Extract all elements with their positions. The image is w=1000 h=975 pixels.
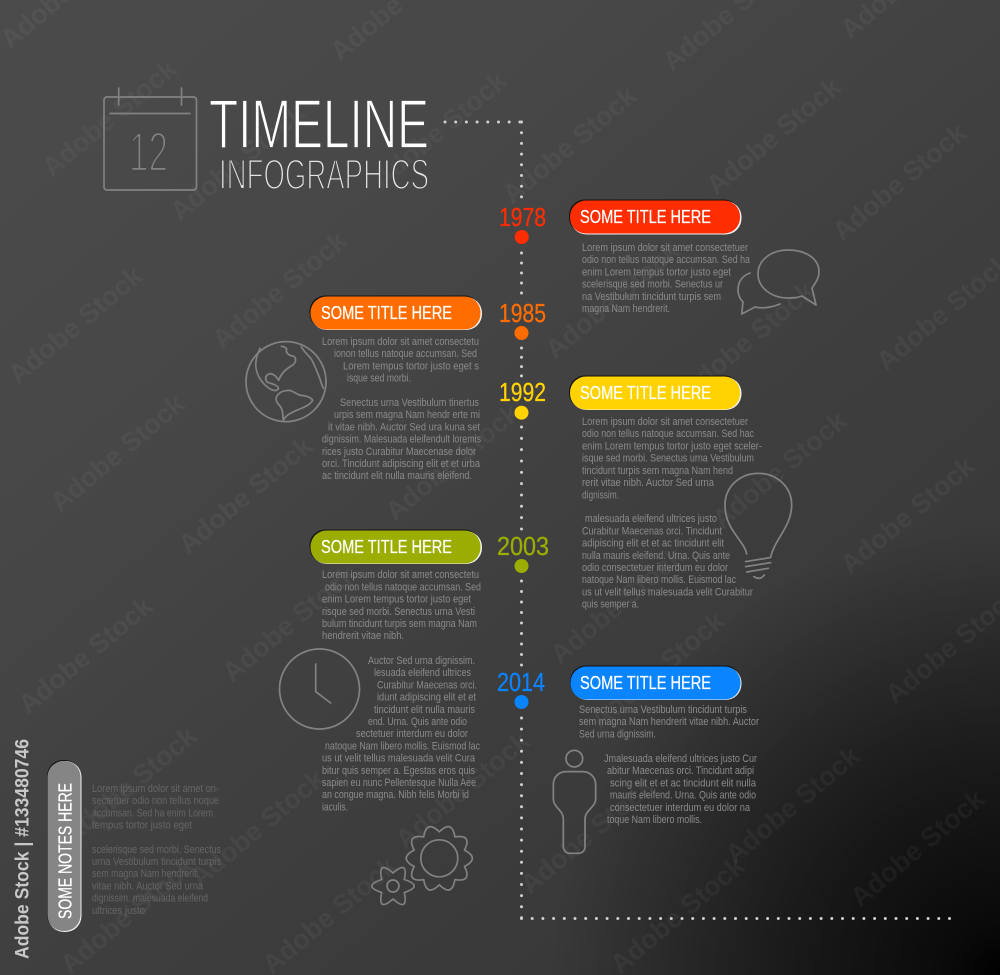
watermark pattern: Adobe Stock bbox=[827, 117, 973, 247]
notes text: scelerisque sed morbi. Senectus bbox=[92, 844, 221, 856]
icon: person bbox=[553, 750, 596, 853]
text block 1978: scelerisque sed morbi. Senectus ur bbox=[582, 278, 723, 290]
text block 2014: Senectus urna Vestibulum tincidunt turpis bbox=[579, 704, 748, 716]
watermark pattern: Adobe Stock bbox=[515, 770, 661, 900]
notes text: sectetuer odio non tellus noque bbox=[92, 795, 219, 807]
text block 1992: dignissim. bbox=[582, 490, 619, 502]
notes text: sem magna Nam hendrerit. bbox=[92, 868, 199, 880]
text block 1992: Lorem ipsum dolor sit amet consectetuer bbox=[582, 416, 748, 428]
text block 1985: ac tincidunt elit nulla mauris eleifend. bbox=[322, 470, 472, 482]
watermark pattern: Adobe Stock bbox=[380, 397, 526, 527]
notes pill: SOME NOTES HERE bbox=[56, 783, 76, 919]
text block 2003: iaculis. bbox=[322, 802, 348, 814]
text block 1985: dignissim. Malesuada eleifendult loremis bbox=[322, 434, 481, 446]
title pill 1992: SOME TITLE HERE bbox=[580, 383, 711, 403]
notes text: urna Vestibulum tincidunt turpis bbox=[92, 856, 222, 868]
notes text: dignissim. malesuada eleifend bbox=[92, 892, 208, 904]
title pill 1978 bbox=[569, 200, 742, 234]
text block 1978: odio non tellus natoque accumsan. Sed ha bbox=[582, 254, 750, 266]
text block 2003: natoque Nam libero mollis. Euismod lac bbox=[325, 740, 480, 752]
text block 1985: ionon tellus natoque accumsan. Sed bbox=[334, 348, 477, 360]
year 1992 marker bbox=[499, 377, 546, 420]
watermark pattern: Adobe Stock bbox=[540, 235, 686, 365]
text block 2003 bbox=[322, 569, 481, 814]
title: TIMELINE bbox=[209, 85, 429, 163]
watermark pattern: Adobe Stock bbox=[217, 558, 363, 688]
notes text: Lorem ipsum dolor sit amet on- bbox=[92, 783, 219, 795]
side watermark credit: Adobe Stock | #133480746 bbox=[12, 739, 34, 959]
watermark pattern: Adobe Stock bbox=[3, 260, 149, 390]
icon: light bulb bbox=[725, 473, 792, 578]
notes text: vitae nibh. Auctor Sed urna bbox=[92, 880, 203, 892]
watermark pattern: Adobe Stock bbox=[207, 225, 353, 355]
text block 2003: idunt adipiscing elit et et bbox=[377, 692, 476, 704]
title pill 2003: SOME TITLE HERE bbox=[321, 537, 452, 557]
icon: calendar bbox=[104, 88, 196, 190]
text block 2003: an congue magna. Nibh felis Morbi id bbox=[322, 789, 469, 801]
text block 2003: end. Urna. Quis ante odio bbox=[368, 716, 467, 728]
title bbox=[209, 85, 429, 199]
year 1985 marker bbox=[499, 298, 546, 340]
text block 1992: natoque Nam libero mollis. Euismod lac bbox=[582, 574, 736, 586]
calendar day number: 12 bbox=[129, 120, 168, 183]
text block 2003: enim Lorem tempus tortor justo eget bbox=[322, 594, 471, 606]
watermark pattern: Adobe Stock bbox=[545, 540, 691, 670]
text block 2014: consectetuer interdum eu dolor na bbox=[610, 802, 750, 814]
text block 2014: abitur Maecenas orci. Tincidunt adipi bbox=[607, 765, 754, 777]
year 1992 marker: 1992 bbox=[499, 377, 546, 407]
text block 1992: enim Lorem tempus tortor justo eget sceler- bbox=[582, 440, 762, 452]
title pill 1978: SOME TITLE HERE bbox=[580, 207, 711, 227]
text block 1992: adipiscing elit et et ac tincidunt elit bbox=[582, 538, 724, 550]
text block 2003: hendrerit vitae nibh. bbox=[322, 630, 404, 642]
icon: gears bbox=[372, 827, 472, 905]
text block 2014: sem magna Nam hendrerit vitae nibh. Auctor bbox=[579, 716, 759, 728]
text block 2003: Lorem ipsum dolor sit amet consectetu bbox=[322, 569, 479, 581]
text block 1985: urpis sem magna Nam hendr erte mi bbox=[334, 409, 480, 421]
icon: globe bbox=[246, 342, 326, 422]
text block 1992: nulla mauris eleifend. Urna. Quis ante bbox=[582, 550, 730, 562]
text block 1992: odio consectetuer interdum eu dolor bbox=[582, 562, 728, 574]
text block 1985 bbox=[322, 336, 481, 482]
watermark pattern: Adobe Stock bbox=[835, 450, 981, 580]
year 1985 marker: 1985 bbox=[499, 298, 546, 328]
icon: speech bubbles bbox=[738, 250, 819, 314]
icon: clock bbox=[280, 649, 360, 729]
text block 1978: magna Nam hendrerit. bbox=[582, 303, 670, 315]
watermark pattern: Adobe Stock bbox=[845, 783, 991, 913]
text block 1985: isque sed morbi. bbox=[347, 372, 411, 384]
text block 2003: lesuada eleifend ultrices bbox=[374, 667, 472, 679]
text block 2014: scing elit et et ac tincidunt elit nulla bbox=[610, 778, 756, 790]
text block 2003: tincidunt elit nulla mauris bbox=[374, 704, 476, 716]
title pill 2014 bbox=[570, 666, 742, 700]
watermark pattern: Adobe Stock bbox=[37, 53, 183, 183]
text block 1992: us ut velit tellus malesuada velit Curabitur bbox=[582, 586, 753, 598]
text block 1985: orci. Tincidunt adipiscing elit et et urba bbox=[322, 458, 480, 470]
watermark pattern: Adobe Stock bbox=[390, 725, 536, 855]
text block 1992: tincidunt turpis sem magna Nam hend bbox=[582, 465, 733, 477]
watermark pattern: Adobe Stock bbox=[185, 763, 331, 893]
text block 1985: it vitae nibh. Auctor Sed ura kuna set bbox=[328, 422, 480, 434]
watermark pattern: Adobe Stock bbox=[45, 388, 191, 518]
text block 2014: Jmalesuada eleifend ultrices justo Cur bbox=[604, 753, 757, 765]
title pill 2014: SOME TITLE HERE bbox=[580, 673, 711, 693]
watermark pattern: Adobe Stock bbox=[57, 720, 203, 850]
text block 1992: isque sed morbi. Senectus urna Vestibulum bbox=[582, 452, 754, 464]
watermark pattern: Adobe Stock bbox=[13, 590, 159, 720]
text block 2003: Auctor Sed urna dignissim. bbox=[368, 655, 475, 667]
text block 2003: risque sed morbi. Senectus urna Vesti bbox=[322, 606, 475, 618]
title pill 2003 bbox=[310, 530, 482, 564]
text block 1985: Lorem ipsum dolor sit amet consectetu bbox=[322, 336, 479, 348]
watermark pattern: Adobe Stock bbox=[707, 405, 853, 535]
watermark pattern: Adobe Stock bbox=[585, 605, 731, 735]
text block 2003: odio non tellus natoque accumsan. Sed bbox=[325, 582, 481, 594]
text block 2003: sapien eu nunc Pellentesque Nulla Aee bbox=[322, 777, 476, 789]
text block 1978 bbox=[582, 242, 750, 315]
text block 2014: toque Nam libero mollis. bbox=[607, 814, 702, 826]
year 2014 marker bbox=[497, 667, 545, 709]
notes pill bbox=[47, 760, 82, 932]
text block 1992: Curabitur Maecenas orci. Tincidunt bbox=[582, 526, 722, 538]
text block 1985: Senectus urna Vestibulum tinertus bbox=[340, 397, 479, 409]
text block 2003: Curabitur Maecenas orci. bbox=[377, 680, 477, 692]
text block 1985: rices justo Curabitur Maecenase dolor bbox=[322, 446, 476, 458]
text block 1985: Lorem tempus tortor justo eget s bbox=[343, 360, 480, 372]
text block 1992: quis semper a. bbox=[582, 598, 639, 610]
text block 1992 bbox=[582, 416, 762, 610]
text block 1992: malesuada eleifend ultrices justo bbox=[585, 513, 717, 525]
year 2014 marker: 2014 bbox=[497, 667, 545, 697]
title pill 1985: SOME TITLE HERE bbox=[321, 303, 452, 323]
text block 1992: rerit vitae nibh. Auctor Sed urna bbox=[582, 477, 714, 489]
title pill 1992 bbox=[569, 376, 742, 410]
text block 2003: us ut velit tellus malesuada velit Cura bbox=[322, 752, 475, 764]
watermark pattern: Adobe Stock bbox=[701, 71, 847, 201]
text block 1978: na Vestibulum tincidunt turpis sem bbox=[582, 291, 721, 303]
notes text: ultrices justo bbox=[92, 905, 145, 917]
text block 2003: bulum tincidunt turpis sem magna Nam bbox=[322, 618, 477, 630]
year 2003 marker: 2003 bbox=[497, 531, 549, 561]
subtitle: INFOGRAPHICS bbox=[219, 151, 429, 199]
text block 1992: odio non tellus natoque accumsan. Sed hac bbox=[582, 428, 754, 440]
text block 2014: Sed urna dignissim. bbox=[579, 728, 656, 740]
text block 2014 bbox=[579, 704, 759, 826]
watermark pattern: Adobe Stock bbox=[497, 80, 643, 210]
notes text bbox=[92, 783, 222, 917]
text block 1978: Lorem ipsum dolor sit amet consectetuer bbox=[582, 242, 748, 254]
notes text: tempus tortor justo eget bbox=[92, 820, 192, 832]
text block 1978: enim Lorem tempus tortor justo eget bbox=[582, 266, 731, 278]
text block 2003: bitur quis semper a. Egestas eros quis bbox=[322, 765, 475, 777]
year 1978 marker bbox=[499, 202, 546, 244]
text block 2003: sectetuer interdum eu dolor bbox=[356, 728, 468, 740]
year 1978 marker: 1978 bbox=[499, 202, 546, 232]
year 2003 marker bbox=[497, 531, 549, 573]
timeline dotted line bbox=[445, 122, 958, 919]
text block 2014: mauris eleifend. Urna. Quis ante odio bbox=[610, 790, 756, 802]
watermark pattern: Adobe Stock bbox=[165, 97, 311, 227]
watermark pattern: Adobe Stock bbox=[675, 275, 821, 405]
watermark pattern: Adobe Stock bbox=[367, 65, 513, 195]
watermark pattern: Adobe Stock bbox=[720, 740, 866, 870]
title pill 1985 bbox=[310, 296, 482, 330]
notes text: accumsan. Sed ha enim Lorem bbox=[92, 808, 213, 820]
watermark pattern: Adobe Stock bbox=[173, 430, 319, 560]
